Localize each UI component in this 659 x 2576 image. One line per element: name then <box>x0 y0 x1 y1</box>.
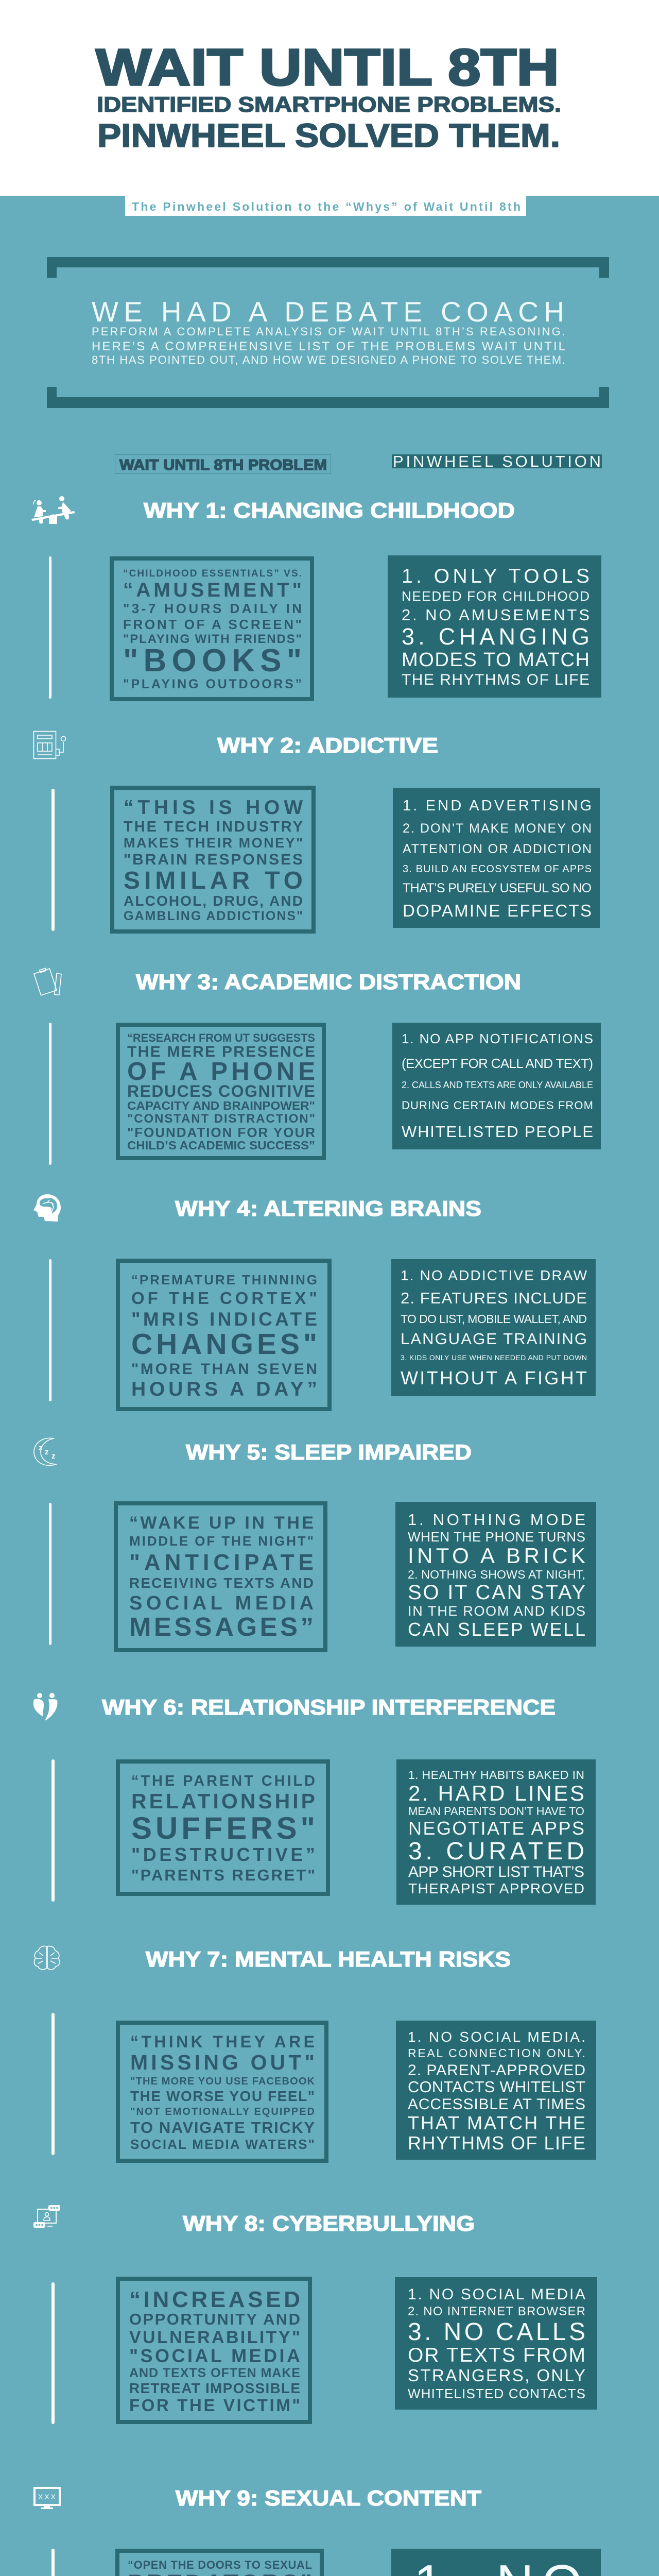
pinwheel solution: INTO A BRICK <box>408 1544 585 1568</box>
problem quotes <box>118 1025 324 1158</box>
pinwheel solution: 3. CURATED <box>408 1838 584 1865</box>
pinwheel solution: STRANGERS, ONLY <box>408 2366 585 2385</box>
problem quotes: “THE PARENT CHILD <box>131 1773 315 1789</box>
problem quotes: "NOT EMOTIONALLY EQUIPPED <box>130 2106 315 2117</box>
problem quotes: “THIS IS HOW <box>124 796 303 819</box>
panel: why 1 <box>31 496 601 699</box>
heading: WHY 2: ADDICTIVE <box>217 733 438 757</box>
problem quotes: FRONT OF A SCREEN" <box>123 617 302 632</box>
problem quotes: "MORE THAN SEVEN <box>131 1361 317 1378</box>
problem quotes: MISSING OUT" <box>130 2050 315 2074</box>
icon: monitor with xxx <box>34 2488 60 2509</box>
problem quotes: SOCIAL MEDIA WATERS" <box>130 2137 315 2152</box>
pinwheel solution: LANGUAGE TRAINING <box>401 1330 587 1348</box>
problem quotes: MIDDLE OF THE NIGHT" <box>129 1533 314 1549</box>
pinwheel solution: IN THE ROOM AND KIDS <box>408 1603 585 1619</box>
icon: moon with zzz <box>34 1438 57 1465</box>
problem quotes: "FOUNDATION FOR YOUR <box>127 1125 315 1140</box>
heading: WHY 3: ACADEMIC DISTRACTION <box>136 970 521 994</box>
panel: why 4 <box>33 1194 596 1409</box>
problem quotes: RETREAT IMPOSSIBLE <box>129 2380 300 2396</box>
heading: WHY 1: CHANGING CHILDHOOD <box>144 498 515 522</box>
pinwheel solution: WITHOUT A FIGHT <box>401 1367 587 1388</box>
problem quotes: THE MERE PRESENCE <box>127 1043 315 1060</box>
pinwheel solution: MEAN PARENTS DON’T HAVE TO <box>408 1805 584 1818</box>
problem quotes: “RESEARCH FROM UT SUGGESTS <box>127 1031 315 1044</box>
heading: WHY 5: SLEEP IMPAIRED <box>186 1440 472 1464</box>
pinwheel solution: 1. ONLY TOOLS <box>402 565 589 587</box>
panel: why 9 <box>34 2486 601 2576</box>
pinwheel solution: NEGOTIATE APPS <box>408 1818 584 1839</box>
problem quotes: "3-7 HOURS DAILY IN <box>123 601 302 616</box>
pinwheel solution: 1. HEALTHY HABITS BAKED IN <box>408 1768 584 1782</box>
problem quotes: “INCREASED <box>129 2287 300 2312</box>
problem quotes: CHILD’S ACADEMIC SUCCESS” <box>127 1139 315 1152</box>
problem quotes: "BOOKS" <box>123 643 302 679</box>
problem quotes: VULNERABILITY" <box>129 2328 300 2347</box>
problem quotes: OF THE CORTEX" <box>131 1289 317 1308</box>
pinwheel solution: WHITELISTED PEOPLE <box>402 1123 593 1141</box>
column label: problem: WAIT UNTIL 8TH PROBLEM <box>119 457 327 473</box>
title: IDENTIFIED SMARTPHONE PROBLEMS. <box>97 92 561 116</box>
pinwheel solution: (EXCEPT FOR CALL AND TEXT) <box>402 1056 593 1071</box>
problem quotes: SOCIAL MEDIA <box>129 1592 314 1614</box>
heading: WHY 4: ALTERING BRAINS <box>175 1196 481 1221</box>
pinwheel solution: 2. NO INTERNET BROWSER <box>408 2304 585 2318</box>
problem quotes: "PARENTS REGRET" <box>131 1866 315 1884</box>
pinwheel solution: 1. NO SOCIAL MEDIA <box>408 2286 585 2303</box>
pinwheel solution: 3. CHANGING <box>402 623 589 650</box>
pinwheel solution: 3. BUILD AN ECOSYSTEM OF APPS <box>403 863 592 875</box>
problem quotes: “CHILDHOOD ESSENTIALS” VS. <box>123 568 302 579</box>
problem quotes <box>112 558 312 699</box>
pinwheel solution <box>388 555 601 698</box>
icon: monitor with chat bubbles <box>33 2205 60 2228</box>
pinwheel solution: OR TEXTS FROM <box>408 2344 585 2366</box>
pinwheel solution: ATTENTION OR ADDICTION <box>403 842 592 856</box>
panel: why 2 <box>34 732 600 931</box>
intro panel with brackets: 8TH HAS POINTED OUT, AND HOW WE DESIGNED A PHONE TO SOLVE THEM. <box>92 353 565 366</box>
problem quotes: "SOCIAL MEDIA <box>129 2345 300 2366</box>
problem quotes: RELATIONSHIP <box>131 1789 315 1813</box>
pinwheel solution: RHYTHMS OF LIFE <box>408 2132 585 2154</box>
problem quotes: "CONSTANT DISTRACTION" <box>127 1112 315 1126</box>
pinwheel solution: 3. KIDS ONLY USE WHEN NEEDED AND PUT DOWN <box>401 1353 587 1362</box>
pinwheel solution <box>391 2549 601 2576</box>
column label: solution: PINWHEEL SOLUTION <box>393 452 601 470</box>
problem quotes <box>117 2551 322 2576</box>
pinwheel solution: DURING CERTAIN MODES FROM <box>402 1099 593 1112</box>
pinwheel solution: ACCESSIBLE AT TIMES <box>408 2096 585 2113</box>
pinwheel solution <box>396 1759 596 1905</box>
pinwheel solution <box>392 1023 601 1149</box>
problem quotes: ALCOHOL, DRUG, AND <box>124 893 303 909</box>
panel: why 7 <box>34 1946 596 2161</box>
problem quotes: THE WORSE YOU FEEL" <box>130 2088 315 2104</box>
pinwheel solution <box>396 2021 596 2160</box>
pinwheel solution: 1. END ADVERTISING <box>403 798 592 814</box>
problem quotes: "DESTRUCTIVE” <box>131 1844 315 1865</box>
pinwheel solution: CAN SLEEP WELL <box>408 1619 585 1640</box>
problem quotes: "THE MORE YOU USE FACEBOOK <box>130 2076 315 2087</box>
problem quotes: CHANGES" <box>131 1328 317 1361</box>
problem quotes: "MRIS INDICATE <box>131 1309 317 1330</box>
heading: WHY 6: RELATIONSHIP INTERFERENCE <box>102 1695 556 1719</box>
icon: monitor with xxx: XXX <box>38 2493 56 2501</box>
pinwheel solution: 2. PARENT-APPROVED <box>408 2062 585 2079</box>
pinwheel solution: 1. NO APP NOTIFICATIONS <box>402 1031 593 1046</box>
pinwheel solution: MODES TO MATCH <box>402 649 589 671</box>
title: WAIT UNTIL 8TH <box>96 39 559 96</box>
title <box>96 39 561 154</box>
pinwheel solution: 1. NO SOCIAL MEDIA. <box>408 2029 585 2045</box>
icon: moon with zzz: z <box>39 1444 42 1452</box>
pinwheel solution: DOPAMINE EFFECTS <box>403 901 592 920</box>
problem quotes: “OPEN THE DOORS TO SEXUAL <box>128 2558 312 2571</box>
problem quotes: FOR THE VICTIM" <box>129 2396 300 2415</box>
pinwheel solution: 2. FEATURES INCLUDE <box>401 1289 587 1307</box>
problem quotes: MESSAGES” <box>129 1612 314 1641</box>
problem quotes <box>116 1503 325 1650</box>
icon: broken heart couple <box>33 1693 57 1721</box>
panel: why 6 <box>33 1693 596 1905</box>
pinwheel solution: WHEN THE PHONE TURNS <box>408 1529 585 1545</box>
heading: WHY 7: MENTAL HEALTH RISKS <box>146 1947 511 1971</box>
pinwheel solution: NEEDED FOR CHILDHOOD <box>402 588 589 604</box>
problem quotes: SUFFERS" <box>131 1811 315 1845</box>
problem quotes: “WAKE UP IN THE <box>129 1513 314 1533</box>
icon: brain outline <box>34 1946 60 1970</box>
pinwheel solution: SO IT CAN STAY <box>408 1581 585 1604</box>
problem quotes: TO NAVIGATE TRICKY <box>130 2119 315 2137</box>
pinwheel solution: 1. NO ADDICTIVE DRAW <box>401 1267 587 1283</box>
pinwheel solution <box>391 1259 596 1396</box>
pinwheel solution: 2. NOTHING SHOWS AT NIGHT, <box>408 1568 585 1581</box>
pinwheel solution: 1. NOTHING MODE <box>408 1511 585 1529</box>
icon: moon with zzz: z <box>51 1452 56 1461</box>
problem quotes <box>118 1761 328 1894</box>
title: PINWHEEL SOLVED THEM. <box>97 117 560 154</box>
intro panel with brackets: PERFORM A COMPLETE ANALYSIS OF WAIT UNTIL 8TH’S REASONING. <box>92 325 565 338</box>
pinwheel solution: 2. CALLS AND TEXTS ARE ONLY AVAILABLE <box>402 1080 593 1090</box>
problem quotes: "PLAYING WITH FRIENDS" <box>123 632 302 646</box>
problem quotes: "ANTICIPATE <box>129 1550 314 1575</box>
panel: why 3 <box>34 968 601 1165</box>
problem quotes <box>118 2023 326 2161</box>
problem quotes: “AMUSEMENT" <box>123 579 302 601</box>
pinwheel solution: THE RHYTHMS OF LIFE <box>402 671 589 688</box>
pinwheel solution <box>393 788 600 928</box>
problem quotes: CAPACITY AND BRAINPOWER" <box>127 1099 315 1112</box>
problem quotes: OPPORTUNITY AND <box>129 2310 300 2328</box>
panel: why 5 <box>34 1438 596 1650</box>
pinwheel solution: THERAPIST APPROVED <box>408 1880 584 1896</box>
intro panel with brackets: WE HAD A DEBATE COACH <box>92 296 564 328</box>
problem quotes: GAMBLING ADDICTIONS" <box>124 909 303 923</box>
panel: why 8 <box>33 2205 597 2424</box>
pinwheel solution: THAT MATCH THE <box>408 2112 585 2133</box>
pinwheel solution: 2. NO AMUSEMENTS <box>402 606 589 624</box>
pinwheel solution: 2. DON’T MAKE MONEY ON <box>403 821 592 836</box>
pinwheel solution: THAT’S PURELY USEFUL SO NO <box>403 881 592 895</box>
problem quotes: RECEIVING TEXTS AND <box>129 1575 314 1591</box>
tagline banner: The Pinwheel Solution to the “Whys” of Wait Until 8th <box>132 200 521 213</box>
problem quotes: “THINK THEY ARE <box>130 2032 315 2051</box>
intro panel with brackets: HERE’S A COMPREHENSIVE LIST OF THE PROBLEMS WAIT UNTIL <box>92 340 565 353</box>
pinwheel solution: REAL CONNECTION ONLY. <box>408 2046 585 2060</box>
problem quotes: REDUCES COGNITIVE <box>127 1082 315 1100</box>
pinwheel solution: TO DO LIST, MOBILE WALLET, AND <box>401 1312 587 1326</box>
problem quotes: THE TECH INDUSTRY <box>124 819 303 835</box>
pinwheel solution <box>395 2277 597 2410</box>
heading: WHY 9: SEXUAL CONTENT <box>176 2486 481 2510</box>
problem quotes: OF A PHONE <box>127 1058 315 1086</box>
problem quotes <box>112 788 314 931</box>
problem quotes: “PREMATURE THINNING <box>131 1272 317 1287</box>
icon: moon with zzz: z <box>45 1448 48 1456</box>
problem quotes <box>118 2279 310 2422</box>
pinwheel solution: APP SHORT LIST THAT’S <box>408 1863 584 1880</box>
pinwheel solution: 2. HARD LINES <box>408 1781 584 1805</box>
pinwheel solution: WHITELISTED CONTACTS <box>408 2386 585 2401</box>
heading: WHY 8: CYBERBULLYING <box>183 2211 475 2235</box>
icon: clipboard and ruler <box>34 968 61 995</box>
problem quotes: HOURS A DAY” <box>131 1378 317 1400</box>
problem quotes: SIMILAR TO <box>124 867 303 894</box>
problem quotes: AND TEXTS OFTEN MAKE <box>129 2366 300 2380</box>
pinwheel solution <box>395 1502 596 1647</box>
tagline banner <box>125 196 526 216</box>
intro panel with brackets <box>47 257 609 408</box>
icon: slot machine <box>34 732 66 758</box>
icon: children on seesaw <box>31 496 75 524</box>
pinwheel solution: 3. NO CALLS <box>408 2318 585 2346</box>
problem quotes: "BRAIN RESPONSES <box>124 851 303 868</box>
problem quotes <box>118 1261 330 1409</box>
problem quotes: MAKES THEIR MONEY" <box>124 835 303 851</box>
icon: head with brain <box>33 1194 61 1222</box>
pinwheel solution: CONTACTS WHITELIST <box>408 2078 585 2096</box>
problem quotes: "PLAYING OUTDOORS” <box>123 677 302 691</box>
